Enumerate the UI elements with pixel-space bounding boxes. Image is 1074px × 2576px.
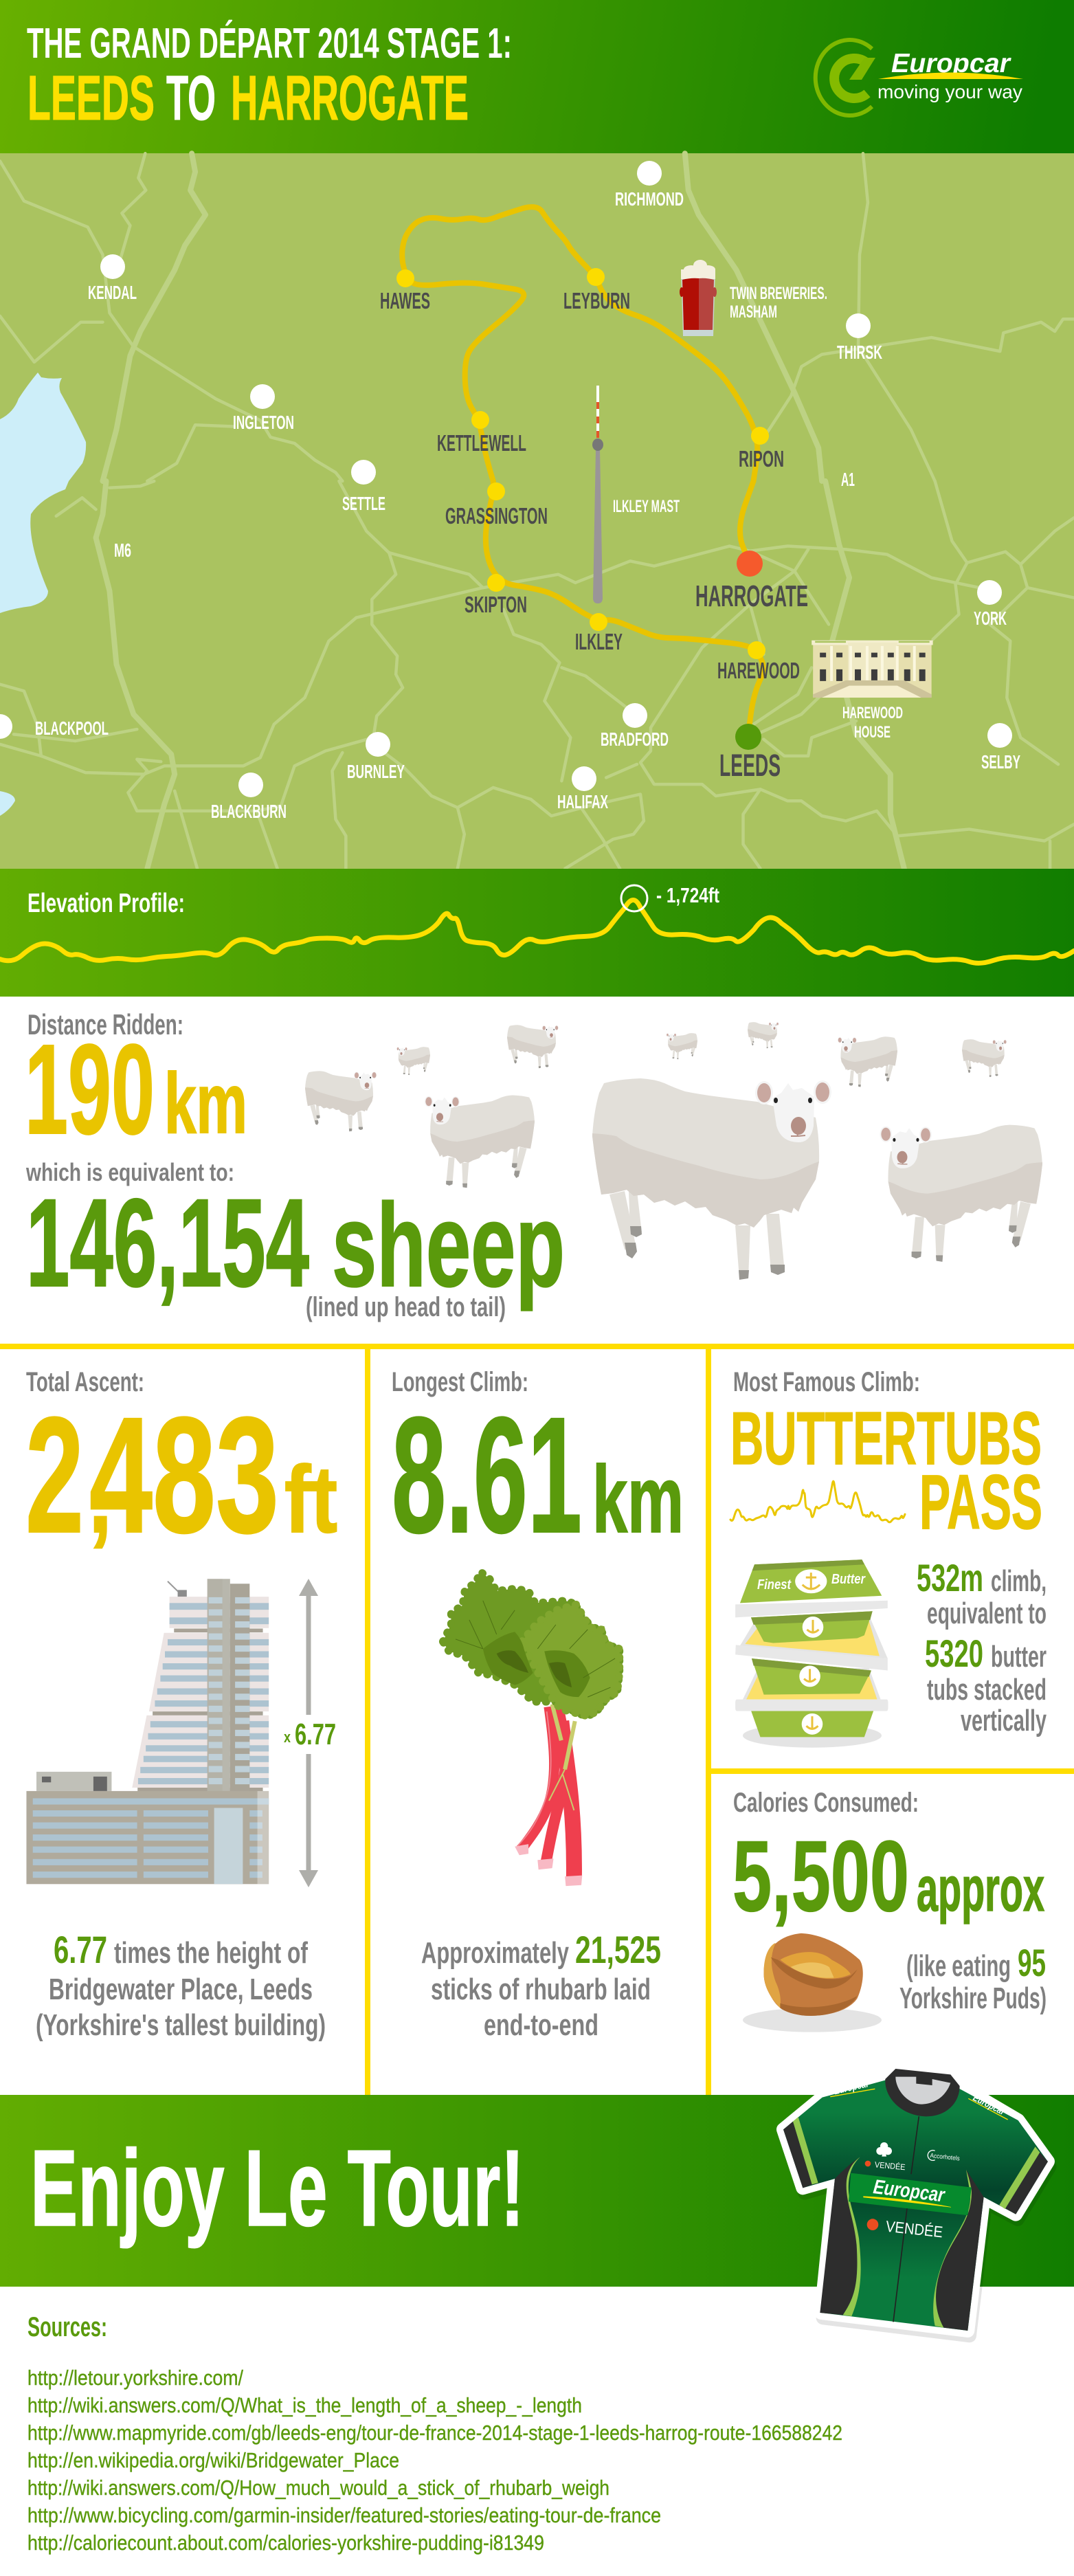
map labels: SETTLE (342, 493, 385, 514)
jersey Vendee small (865, 2159, 906, 2172)
panel: route map (0, 153, 1074, 869)
route line (402, 207, 763, 737)
caption: butter tub comparison (917, 1556, 1047, 1737)
jersey Vendee large (867, 2217, 943, 2241)
panel: calories consumed (732, 1788, 1047, 2032)
label: total ascent: Total Ascent: (26, 1367, 144, 1397)
map labels: YORK (974, 608, 1007, 629)
caption: pudding comparison: 95 (1018, 1941, 1046, 1984)
caption: rhubarb comparison: end-to-end (484, 2008, 598, 2042)
stat: 146,154 sheep: 146,154 (26, 1173, 309, 1313)
map labels: HOUSE (854, 723, 891, 742)
map labels: HAWES (380, 288, 430, 313)
heading: elevation profile: Elevation Profile: (27, 889, 185, 918)
map labels: BLACKPOOL (35, 718, 109, 739)
title line 2: LEEDS (27, 63, 155, 133)
label: most famous climb: Most Famous Climb: (733, 1367, 920, 1397)
callout: x 6.77 (284, 1718, 336, 1751)
map labels: LEYBURN (563, 288, 630, 313)
text: Butter: Butter (831, 1572, 866, 1587)
stat: 8.61km: 8.61 (392, 1383, 582, 1567)
map labels: ILKLEY (575, 629, 623, 654)
map labels: KENDAL (88, 282, 137, 303)
panel: longest climb (392, 1367, 684, 2042)
water: coast (0, 373, 86, 816)
map labels: ILKLEY MAST (613, 497, 680, 516)
source links list: http://en.wikipedia.org/wiki/Bridgewater_Place (27, 2448, 399, 2472)
Europcar logo: moving your way (877, 81, 1022, 102)
caption: butter tub comparison: butter (991, 1640, 1047, 1674)
label: distance ridden: Distance Ridden: (27, 1008, 183, 1041)
map labels: M6 (114, 540, 131, 561)
caption: rhubarb comparison: 21,525 (575, 1928, 661, 1971)
jersey Vendee small: VENDÉE (874, 2159, 906, 2172)
icon: Ilkley mast (592, 386, 603, 603)
stat: 2,483ft: , (89, 1439, 112, 1554)
stat: 2,483ft: ft (284, 1447, 337, 1553)
town markers (0, 161, 1012, 797)
elevation line (0, 900, 1074, 963)
marker: Leeds start (735, 724, 761, 750)
source links list (27, 2366, 842, 2555)
stat: 2,483ft: 483 (89, 1383, 279, 1567)
road network (0, 153, 1074, 869)
panel: distance ridden (25, 1008, 1042, 1322)
icon: beer glass (680, 260, 717, 336)
map labels: HAREWOOD (717, 658, 800, 683)
map labels: HARROGATE (695, 579, 808, 613)
map labels: RICHMOND (615, 188, 684, 210)
source links list: http://www.mapmyride.com/gb/leeds-eng/tour-de-france-2014-stage-1-leeds-harrog-route-166588242 (27, 2421, 842, 2445)
map labels: INGLETON (233, 412, 294, 433)
map labels (35, 188, 1020, 822)
map labels: KETTLEWELL (437, 430, 526, 456)
marker: Harrogate finish (737, 551, 763, 577)
mini elevation line (730, 1481, 905, 1522)
arrow: height scale (299, 1579, 318, 1887)
icon: Harewood House (812, 641, 933, 698)
jersey shoulder text right: Europcar (972, 2092, 1007, 2118)
source links list: http://wiki.answers.com/Q/How_much_would_a_stick_of_rhubarb_weigh (27, 2476, 609, 2500)
map labels: GRASSINGTON (445, 503, 548, 529)
headline: Enjoy Le Tour: Enjoy Le Tour! (30, 2128, 524, 2249)
source links list: http://www.bicycling.com/garmin-insider/featured-stories/eating-tour-de-france (27, 2503, 661, 2527)
title line 2 (27, 63, 469, 133)
jersey Europcar text: Europcar (872, 2175, 947, 2207)
map labels: MASHAM (730, 302, 777, 322)
caption: building comparison (36, 1928, 326, 2042)
caption: building comparison: (Yorkshire's tallest building) (36, 2008, 326, 2042)
map labels: TWIN BREWERIES. (730, 284, 827, 303)
stat: 190km: km (164, 1056, 247, 1151)
panel: most famous climb (730, 1367, 1047, 1748)
map labels: SELBY (981, 751, 1020, 773)
sheep flock (305, 1022, 1042, 1280)
stat: 190km: 190 (25, 1019, 155, 1161)
map labels: HALIFAX (557, 791, 608, 812)
peak marker (621, 885, 647, 911)
caption: building comparison: times the height of (114, 1936, 308, 1970)
map labels: SKIPTON (465, 592, 527, 617)
note: head to tail: (lined up head to tail) (306, 1292, 506, 1322)
title line 2: TO (166, 63, 216, 133)
peak value: - 1,724ft (656, 883, 719, 907)
source links list: http://wiki.answers.com/Q/What_is_the_length_of_a_sheep_-_length (27, 2393, 582, 2417)
panel: elevation profile (0, 869, 1074, 997)
source links list: http://letour.yorkshire.com/ (27, 2366, 243, 2390)
jersey club emblem (876, 2142, 892, 2157)
label: calories consumed: Calories Consumed: (733, 1788, 919, 1818)
label: equivalent: which is equivalent to: (25, 1158, 234, 1186)
source links list: http://caloriecount.about.com/calories-yorkshire-pudding-i81349 (27, 2531, 544, 2555)
map labels: A1 (841, 469, 855, 490)
caption: pudding comparison: (like eating (906, 1949, 1011, 1983)
stat: 146,154 sheep: sheep (332, 1179, 565, 1311)
map labels: RIPON (739, 446, 784, 471)
title line 2: HARROGATE (231, 63, 469, 133)
icon: team jersey (783, 2069, 1050, 2335)
jersey Vendee large: VENDÉE (885, 2217, 943, 2241)
Europcar logo: Europcar (891, 49, 1011, 78)
map labels: THIRSK (837, 342, 882, 363)
map labels: HAREWOOD (842, 704, 903, 722)
header banner (0, 0, 1074, 153)
stat: 8.61km: km (592, 1447, 684, 1553)
map labels: LEEDS (719, 748, 781, 783)
label: longest climb: Longest Climb: (392, 1367, 528, 1397)
caption: building comparison: Bridgewater Place, Leeds (49, 1973, 313, 2006)
caption: butter tub comparison: 5320 (925, 1632, 983, 1675)
caption: rhubarb comparison: sticks of rhubarb laid (431, 1973, 651, 2006)
yellow grid dividers (0, 1344, 1074, 2095)
stat: 5,500 approx: 5,500 (732, 1820, 909, 1932)
caption: rhubarb comparison (421, 1928, 661, 2042)
map labels: BLACKBURN (211, 801, 287, 822)
callout: x 6.77: x (284, 1729, 291, 1746)
jersey shoulder text left: Europcar (833, 2078, 871, 2097)
stat: 2,483ft: 2 (25, 1383, 84, 1567)
icon: Bridgewater Place tower (26, 1579, 269, 1884)
panel: sources (27, 2312, 842, 2555)
panel: Enjoy Le Tour banner (0, 2095, 1074, 2287)
icon: rhubarb (443, 1572, 620, 1886)
caption: rhubarb comparison: Approximately (421, 1936, 569, 1970)
caption: butter tub comparison: 532m (917, 1556, 983, 1599)
caption: pudding comparison (899, 1941, 1047, 2015)
map labels: BRADFORD (601, 729, 669, 750)
icon: Yorkshire pudding (743, 1933, 882, 2032)
caption: building comparison: 6.77 (54, 1928, 107, 1971)
panel: total ascent (25, 1367, 337, 2042)
text: Finest: Finest (757, 1577, 792, 1592)
title line 1: THE GRAND DÉPART 2014 STAGE 1: (27, 20, 512, 67)
route stops (396, 268, 769, 659)
icon: stacked butter tubs (735, 1559, 888, 1748)
map labels: BURNLEY (347, 761, 405, 782)
callout: x 6.77: 6.77 (295, 1718, 336, 1751)
jersey Accorhotels: Accorhotels (930, 2152, 961, 2162)
Europcar logo (816, 40, 1023, 115)
heading: sources: Sources: (27, 2312, 107, 2342)
